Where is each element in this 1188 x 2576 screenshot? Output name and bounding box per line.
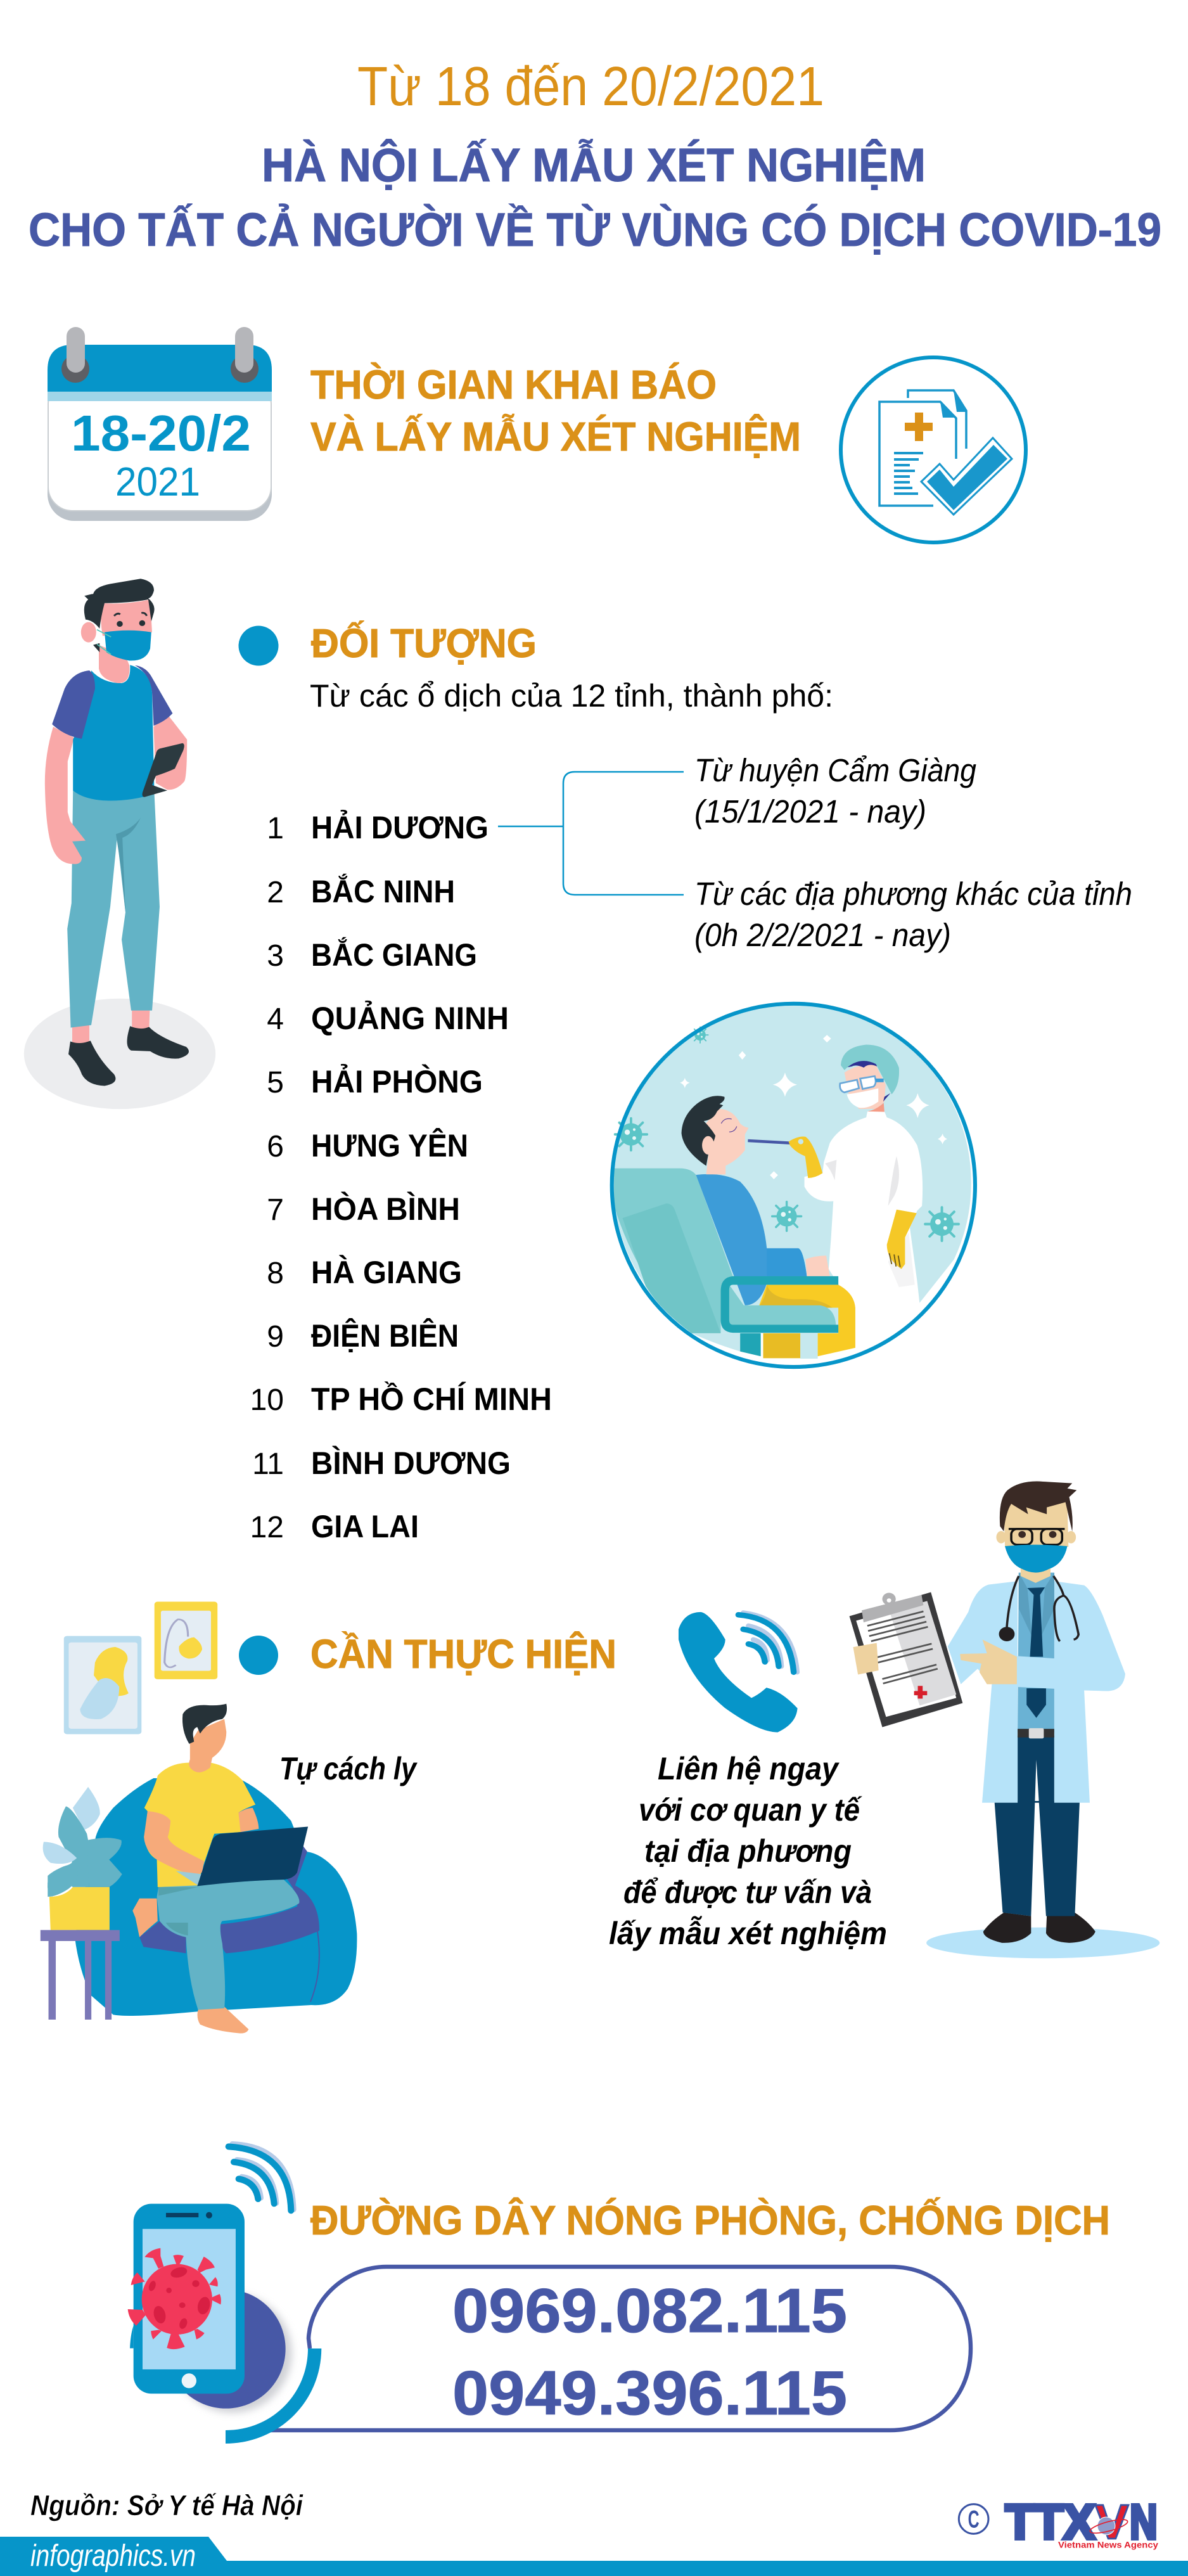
nurse xyxy=(758,1044,942,1359)
crescent accent xyxy=(226,2349,321,2444)
icon: phone handset with signal xyxy=(679,1612,798,1733)
list of 12 provinces xyxy=(250,810,552,1544)
list of 12 provinces: 2 xyxy=(267,876,284,909)
intro text: Từ các ổ dịch của 12 tỉnh, thành phố: xyxy=(310,678,833,714)
list of 12 provinces: 6 xyxy=(267,1130,284,1163)
text: self isolate: Tự cách ly xyxy=(279,1751,418,1786)
swab xyxy=(748,1141,796,1143)
logo: TTXVN: C xyxy=(968,2506,980,2534)
illustration: man self isolating on sofa xyxy=(41,1602,357,2034)
headline line 1: HÀ NỘI LẤY MẪU XÉT NGHIỆM xyxy=(262,139,926,191)
list of 12 provinces: TP HỒ CHÍ MINH xyxy=(311,1381,552,1417)
bullet dot xyxy=(239,1636,278,1675)
sparkles xyxy=(680,1035,947,1179)
date line: Từ 18 đến 20/2/2021 xyxy=(357,56,824,117)
text: contact health authority xyxy=(609,1751,887,1951)
list of 12 provinces: 8 xyxy=(267,1257,284,1290)
list of 12 provinces: 3 xyxy=(267,939,284,973)
heading: what to do: CẦN THỰC HIỆN xyxy=(310,1631,616,1677)
list of 12 provinces: QUẢNG NINH xyxy=(311,1001,509,1036)
virus xyxy=(128,2248,221,2349)
list of 12 provinces: 7 xyxy=(267,1193,284,1227)
sofa xyxy=(75,1778,357,2016)
calendar year: 2021 xyxy=(115,459,200,504)
heading: registration time: THỜI GIAN KHAI BÁO xyxy=(310,362,717,407)
logo: TTXVN: N xyxy=(1130,2496,1158,2549)
list of 12 provinces: 5 xyxy=(267,1066,284,1099)
heading: registration time: VÀ LẤY MẪU XÉT NGHIỆM xyxy=(310,413,801,459)
text: contact health authority: để được tư vấn và xyxy=(623,1874,872,1910)
notes: Hải Dương details: (0h 2/2/2021 - nay) xyxy=(694,917,951,953)
list of 12 provinces: HẢI DƯƠNG xyxy=(311,810,489,845)
footer bar xyxy=(0,2537,1188,2576)
panel: hotline xyxy=(226,2197,1110,2444)
text: contact health authority: lấy mẫu xét nghiệm xyxy=(609,1916,887,1951)
bullet dot xyxy=(238,626,279,665)
heading: target group: ĐỐI TƯỢNG xyxy=(311,620,537,666)
list of 12 provinces: BẮC GIANG xyxy=(311,937,477,973)
hotline heading: ĐƯỜNG DÂY NÓNG PHÒNG, CHỐNG DỊCH xyxy=(310,2197,1110,2243)
logo: TTXVN: Vietnam News Agency xyxy=(1058,2540,1158,2550)
list of 12 provinces: HẢI PHÒNG xyxy=(311,1064,483,1099)
illustration: doctor with clipboard xyxy=(850,1482,1159,1958)
text: contact health authority: với cơ quan y tế xyxy=(639,1792,862,1828)
list of 12 provinces: 11 xyxy=(252,1447,284,1481)
pill outline xyxy=(271,2267,971,2430)
virus xyxy=(615,1027,959,1241)
list of 12 provinces: 4 xyxy=(267,1003,284,1036)
illustration: swab test in circle xyxy=(612,1004,975,1368)
chair arm xyxy=(721,1276,838,1356)
list of 12 provinces: 9 xyxy=(267,1320,284,1354)
connector bracket xyxy=(498,772,684,895)
list of 12 provinces: HÒA BÌNH xyxy=(311,1191,460,1227)
patient xyxy=(682,1096,830,1305)
illustration: man with mask and phone xyxy=(24,579,215,1109)
icon: medical document with check xyxy=(841,357,1026,542)
list of 12 provinces: HƯNG YÊN xyxy=(311,1128,468,1163)
plant and table xyxy=(41,1787,122,2020)
heading: registration time xyxy=(310,362,801,459)
phone number 1: 0969.082.115 xyxy=(452,2276,847,2345)
source: Nguồn: Sở Y tế Hà Nội xyxy=(30,2489,303,2522)
list of 12 provinces: GIA LAI xyxy=(311,1509,419,1544)
title xyxy=(29,56,1161,256)
list of 12 provinces: ĐIỆN BIÊN xyxy=(311,1318,459,1354)
list of 12 provinces: BÌNH DƯƠNG xyxy=(311,1445,511,1481)
list of 12 provinces: BẮC NINH xyxy=(311,874,455,909)
list of 12 provinces: 10 xyxy=(250,1383,284,1417)
person xyxy=(132,1704,308,2034)
website: infographics.vn xyxy=(30,2539,196,2573)
logo: TTXVN xyxy=(959,2496,1158,2550)
panel: target group xyxy=(238,620,833,714)
notes: Hải Dương details: Từ huyện Cẩm Giàng xyxy=(694,752,976,788)
notes: Hải Dương details xyxy=(694,752,1132,953)
picture frames xyxy=(64,1602,217,1734)
calendar date: 18-20/2 xyxy=(71,405,251,461)
notes: Hải Dương details: Từ các địa phương khác của tỉnh xyxy=(694,876,1132,912)
icon: calendar xyxy=(48,327,272,521)
panel: actions xyxy=(239,1631,616,1786)
phone number 2: 0949.396.115 xyxy=(452,2358,847,2428)
text: contact health authority: tại địa phương xyxy=(644,1833,852,1869)
notes: Hải Dương details: (15/1/2021 - nay) xyxy=(694,793,926,830)
list of 12 provinces: 1 xyxy=(267,812,284,845)
list of 12 provinces: HÀ GIANG xyxy=(311,1255,462,1290)
text: contact health authority: Liên hệ ngay xyxy=(658,1751,840,1786)
logo: TTXVN: TTX xyxy=(1006,2496,1095,2549)
logo: TTXVN: V xyxy=(1095,2496,1129,2549)
list of 12 provinces: 12 xyxy=(250,1511,284,1544)
illustration: smartphone with virus and signal xyxy=(128,2144,293,2413)
